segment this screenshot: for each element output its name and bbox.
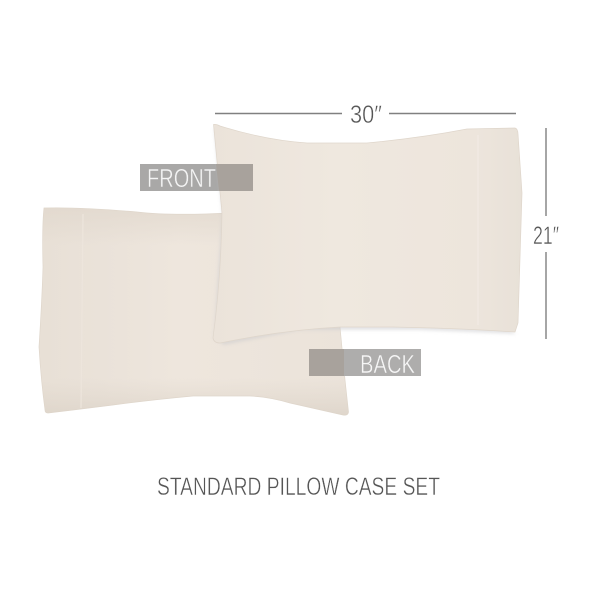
width dimension: 30″ xyxy=(350,101,382,129)
back pillow case xyxy=(39,208,348,415)
front label: FRONT xyxy=(147,163,216,193)
front label overlap on pillow xyxy=(216,164,253,191)
back label: BACK xyxy=(360,349,416,379)
front pillow case xyxy=(213,124,522,345)
title: STANDARD PILLOW CASE SET xyxy=(157,473,440,501)
height dimension: 21″ xyxy=(533,222,559,250)
back label xyxy=(309,349,421,379)
